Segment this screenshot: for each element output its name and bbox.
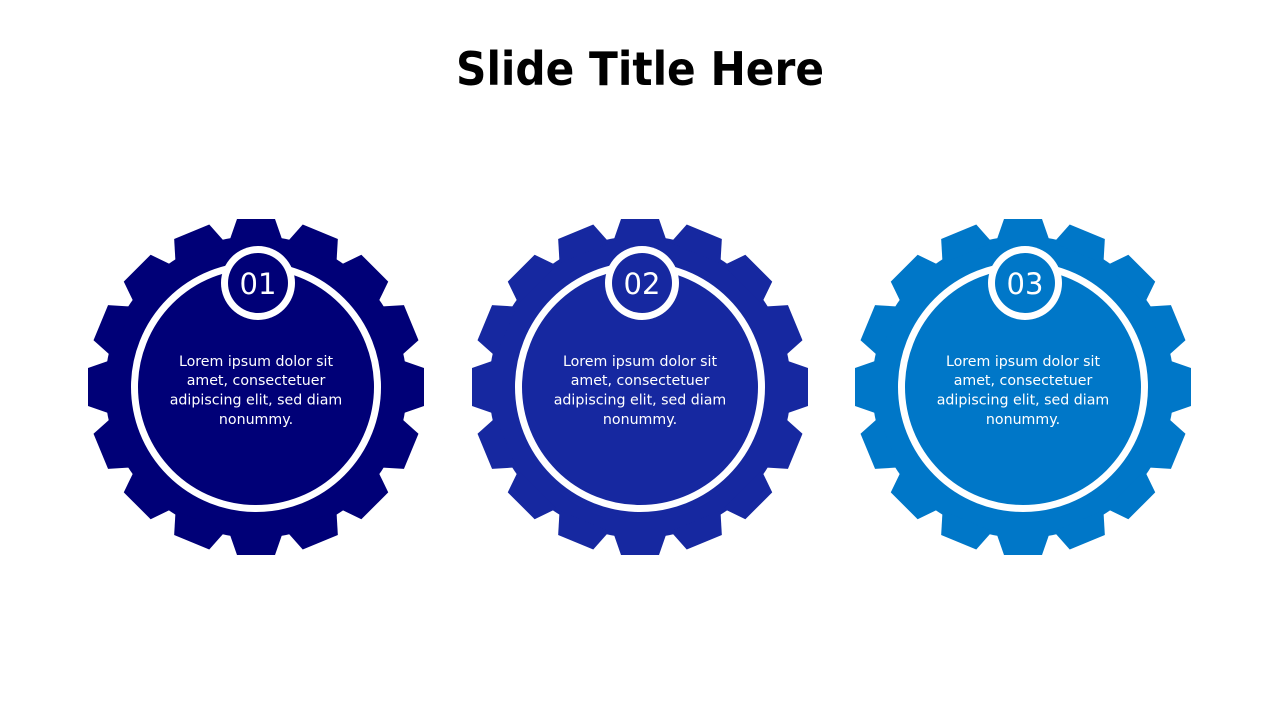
title: Slide Title Here <box>456 42 824 96</box>
text 3: nonummy. <box>986 412 1060 428</box>
text 3: Lorem ipsum dolor sit <box>946 354 1100 370</box>
text 2: amet, consectetuer <box>571 373 709 389</box>
text 2: nonummy. <box>603 412 677 428</box>
gear 1 <box>88 219 424 555</box>
gear 3 <box>855 219 1191 555</box>
text 3: amet, consectetuer <box>954 373 1092 389</box>
badge 01 <box>221 246 295 320</box>
text 1: Lorem ipsum dolor sit <box>179 354 333 370</box>
text 3: adipiscing elit, sed diam <box>937 392 1109 408</box>
badge 02: 02 <box>624 267 660 301</box>
text 1: nonummy. <box>219 412 293 428</box>
gear 2 <box>472 219 808 555</box>
text 2: Lorem ipsum dolor sit <box>563 354 717 370</box>
badge 03: 03 <box>1007 267 1043 301</box>
badge 01: 01 <box>240 267 276 301</box>
badge 03 <box>988 246 1062 320</box>
text 1: amet, consectetuer <box>187 373 325 389</box>
badge 02 <box>605 246 679 320</box>
text 1: adipiscing elit, sed diam <box>170 392 342 408</box>
text 2: adipiscing elit, sed diam <box>554 392 726 408</box>
